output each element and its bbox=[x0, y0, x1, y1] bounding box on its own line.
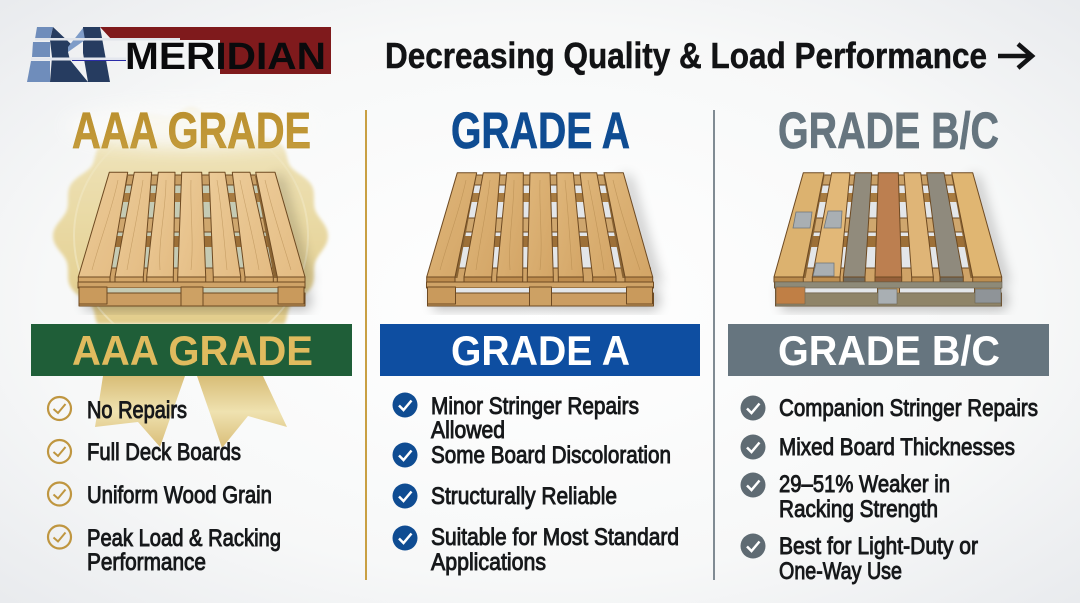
heading: AAA grade: AAA GRADE bbox=[72, 102, 311, 159]
logo: Meridian bbox=[27, 27, 331, 82]
item: Peak Load and Racking Performance: Peak Load & Racking bbox=[87, 525, 281, 552]
item: Some Board Discoloration: Some Board Discoloration bbox=[431, 442, 671, 469]
panel: Grade A bbox=[380, 102, 700, 576]
item: Suitable for Most Standard Applications: Applications bbox=[431, 549, 546, 576]
item: Peak Load and Racking Performance bbox=[48, 525, 281, 576]
top heading: Decreasing Quality & Load Performance bbox=[385, 35, 987, 76]
item: Best for Light-Duty or One-Way Use: One-Way Use bbox=[779, 558, 902, 585]
illustration: good pallet bbox=[426, 173, 662, 310]
logo red block bbox=[100, 27, 331, 74]
divider: gray bbox=[713, 110, 715, 580]
list: Grade A features bbox=[392, 392, 679, 576]
metal repair plates bbox=[793, 211, 842, 276]
heading: Grade A: GRADE A bbox=[451, 102, 630, 159]
item: No Repairs: No Repairs bbox=[87, 397, 187, 424]
logo wordmark: MERIDIAN bbox=[125, 36, 326, 78]
banner: Grade A bbox=[380, 324, 700, 376]
list: AAA features bbox=[48, 397, 281, 576]
list: Grade B/C features bbox=[740, 395, 1038, 585]
item: weaker racking strength: Racking Strength bbox=[779, 496, 938, 523]
item: Minor Stringer Repairs Allowed: Allowed bbox=[431, 417, 505, 444]
item: Suitable for Most Standard Applications bbox=[392, 524, 679, 576]
item: Full Deck Boards: Full Deck Boards bbox=[87, 439, 241, 466]
logo M mark bbox=[27, 27, 180, 82]
item: Suitable for Most Standard Applications: Suitable for Most Standard bbox=[431, 524, 679, 551]
icon: gold seal ribbons bbox=[95, 376, 287, 448]
illustration: repaired pallet bbox=[774, 173, 1010, 310]
banner: Grade A: GRADE A bbox=[451, 327, 630, 374]
icon: gold seal rosette bbox=[53, 104, 328, 353]
illustration: new pallet bbox=[78, 172, 314, 310]
item: Best for Light-Duty or One-Way Use: Best for Light-Duty or bbox=[779, 533, 978, 560]
banner: Grade B/C: GRADE B/C bbox=[778, 327, 1000, 374]
panel: AAA grade bbox=[31, 102, 352, 576]
divider: gold bbox=[365, 110, 367, 580]
banner: Grade B/C bbox=[728, 324, 1049, 376]
heading: Grade B/C: GRADE B/C bbox=[778, 102, 999, 159]
item: Minor Stringer Repairs Allowed bbox=[392, 392, 639, 444]
item: Structurally Reliable: Structurally Reliable bbox=[431, 483, 617, 510]
item: Minor Stringer Repairs Allowed: Minor Stringer Repairs bbox=[431, 393, 639, 420]
item: Mixed Board Thicknesses: Mixed Board Thicknesses bbox=[779, 434, 1015, 461]
item: Peak Load and Racking Performance: Performance bbox=[87, 549, 206, 576]
arrow: decreasing direction bbox=[998, 44, 1032, 68]
item: weaker racking strength: 29–51% Weaker in bbox=[779, 471, 950, 498]
item: Best for Light-Duty or One-Way Use bbox=[740, 533, 978, 585]
item: Full Deck Boards bbox=[48, 439, 241, 466]
item: No Repairs bbox=[48, 397, 187, 424]
banner: AAA grade: AAA GRADE bbox=[72, 327, 313, 374]
worn base rail and blocks bbox=[775, 282, 1002, 306]
item: Companion Stringer Repairs: Companion Stringer Repairs bbox=[779, 395, 1038, 422]
item: weaker racking strength bbox=[740, 471, 950, 523]
panel: Grade B/C bbox=[728, 102, 1049, 585]
item: Uniform Wood Grain: Uniform Wood Grain bbox=[87, 482, 272, 509]
